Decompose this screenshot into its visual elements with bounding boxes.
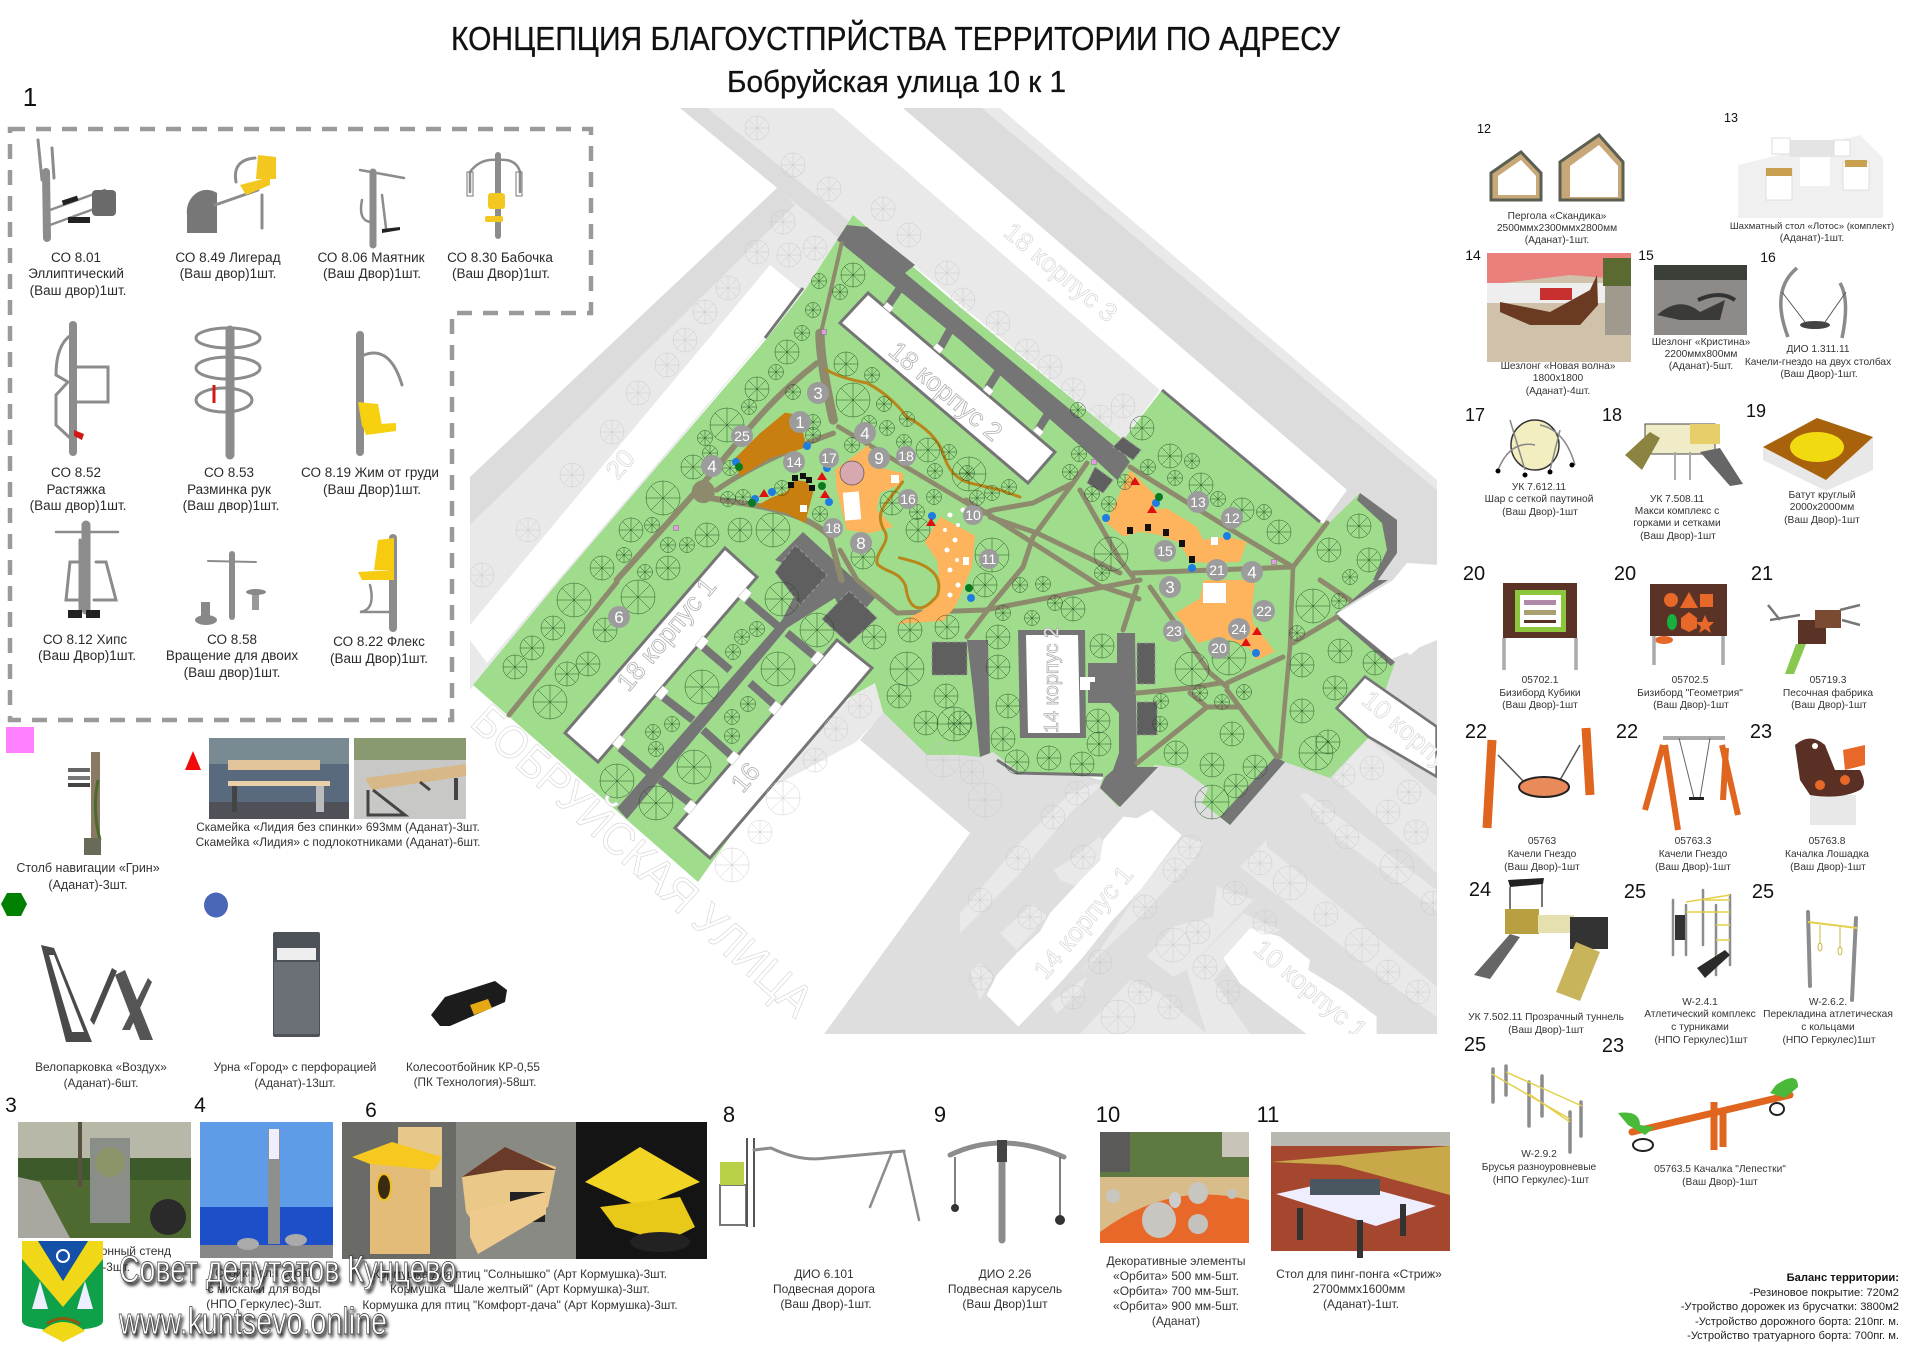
item 11: ping-pong table: (Аданат)-1шт. — [1323, 1297, 1399, 1311]
numbered plan markers: 11 — [982, 551, 996, 567]
item 9: rope carousel: ДИО 2.26 — [979, 1267, 1032, 1281]
item 18: maxi complex: горками и сетками — [1633, 518, 1721, 529]
item 19: trampoline — [1746, 401, 1873, 526]
item 14: lounger photo: (Аданат)-4шт. — [1526, 386, 1590, 397]
item: litter bin: (Аданат)-13шт. — [254, 1076, 336, 1090]
paved footpaths — [509, 243, 1350, 763]
item 20: busy board cubes — [1463, 563, 1581, 711]
rubber surface zones — [733, 413, 813, 523]
numbered plan markers: 9 — [874, 449, 884, 468]
item 15: lounger photo: (Аданат)-5шт. — [1669, 361, 1733, 372]
context labels: 14 корпус 1 — [1027, 860, 1139, 985]
item 23: rocking horse: 23 — [1750, 721, 1772, 743]
item 12: pergola: Пергола «Скандика» — [1508, 211, 1607, 222]
item: bicycle rack — [35, 945, 167, 1090]
item 18: maxi complex — [1602, 405, 1743, 542]
item 23: rocking horse — [1750, 721, 1869, 873]
item: СО 8.22 Флекс: (Ваш Двор)1шт. — [330, 651, 428, 666]
numbered plan markers: 13 — [1190, 494, 1206, 510]
numbered plan markers: 1 — [795, 413, 805, 432]
building: 16: 16 — [724, 756, 766, 798]
item 16: nest swing on two posts: Качели-гнездо на двух столбах — [1745, 356, 1891, 368]
item 13: chess table: (Аданат)-1шт. — [1780, 233, 1844, 244]
watermark: council name: Совет депутатов Кунцево — [119, 1249, 456, 1291]
photo: dog water post: (НПО Геркулес)-3шт. — [206, 1297, 322, 1311]
item: СО 8.12 Хипс — [38, 525, 136, 663]
item 19: trampoline: 19 — [1746, 401, 1766, 421]
item 10: decorative spheres: 10 — [1096, 1102, 1120, 1127]
numbered plan markers: 21 — [1209, 562, 1225, 578]
item: СО 8.30 Бабочка: (Ваш Двор)1шт. — [452, 266, 550, 281]
item 16: nest swing on two posts: (Ваш Двор)-1шт. — [1780, 369, 1858, 380]
number 4: 4 — [194, 1094, 206, 1117]
item 19: trampoline: Батут круглый — [1788, 490, 1856, 501]
item 17: web sphere — [1465, 405, 1593, 518]
item 12: pergola — [1477, 122, 1623, 246]
item 11: ping-pong table: 11 — [1257, 1102, 1279, 1127]
item: СО 8.06 Маятник: (Ваш Двор)1шт. — [323, 266, 421, 281]
photo: bird feeders: Кормушка "Шале желтый" (Арт Кормушка)-3шт. — [390, 1282, 650, 1296]
numbered plan markers: 25 — [734, 428, 750, 444]
numbered plan markers: 20 — [1211, 640, 1227, 656]
item 18: maxi complex: 18 — [1602, 405, 1622, 425]
item 8: zipline: (Ваш Двор)-1шт. — [780, 1297, 872, 1311]
item 13: chess table — [1724, 111, 1894, 244]
photo: bird feeders: Кормушка для птиц "Комфорт-дача" (Арт Кормушка)-3шт. — [362, 1298, 678, 1312]
item 25: athletic complex: (НПО Геркулес)1шт — [1654, 1035, 1748, 1046]
item: СО 8.19 Жим от груди — [301, 335, 439, 497]
item 10: decorative spheres: «Орбита» 500 мм-5шт. — [1113, 1269, 1239, 1283]
building: 14 корпус 2: 14 корпус 2 — [1041, 627, 1063, 733]
number 3: 3 — [5, 1094, 17, 1117]
numbered plan markers: 22 — [1256, 603, 1272, 619]
item 20: busy board cubes: 05702.1 — [1522, 675, 1559, 686]
item 12: pergola: (Аданат)-1шт. — [1525, 235, 1589, 246]
item: СО 8.22 Флекс — [330, 538, 428, 666]
context labels: БОБРУЙСКАЯ УЛИЦА — [462, 694, 824, 1027]
item 13: chess table: 13 — [1724, 111, 1738, 125]
item 20: busy board cubes: 20 — [1463, 563, 1485, 585]
item 10: decorative spheres: «Орбита» 700 мм-5шт. — [1113, 1284, 1239, 1298]
item 14: lounger photo: 14 — [1465, 247, 1481, 263]
watermark: website: www.kuntsevo.online — [118, 1301, 387, 1343]
item: СО 8.58 Вращение для двоих — [166, 554, 298, 680]
item 22: swing: 05763.3 — [1675, 836, 1712, 847]
item 19: trampoline: 2000х2000мм — [1790, 502, 1854, 513]
numbered plan markers: 3 — [1165, 578, 1175, 597]
photo: benches — [196, 738, 480, 849]
item 25: athletic complex: 25 — [1624, 881, 1646, 903]
item 24: tunnel complex: УК 7.502.11 Прозрачный туннель — [1468, 1012, 1624, 1023]
photo: info stand: Информационный стенд — [34, 1244, 171, 1258]
item 25: pull-up bar with rings: 25 — [1752, 881, 1774, 903]
context labels: 10 корпус 1 — [1248, 933, 1373, 1045]
item 23: seesaw: 23 — [1602, 1035, 1624, 1057]
item 22: nest swing — [1465, 721, 1590, 873]
title — [451, 20, 1341, 99]
numbered plan markers: 8 — [856, 534, 866, 553]
photo: bird feeders — [342, 1122, 707, 1312]
item 25: pull-up bar with rings: W-2.6.2. — [1809, 997, 1847, 1008]
parking lots — [775, 437, 1157, 735]
road stubs and thin curbs — [620, 288, 1320, 803]
item: СО 8.53 Разминка рук: СО 8.53 — [204, 465, 254, 480]
lawn — [473, 215, 1397, 882]
item 18: maxi complex: Макси комплекс с — [1635, 506, 1719, 517]
item: СО 8.52 Растяжка — [30, 325, 126, 513]
legend: green hexagon — [1, 893, 27, 916]
item: wheel stop — [406, 981, 540, 1089]
item 14: lounger photo: 1800х1800 — [1533, 373, 1584, 384]
item 15: lounger photo: 15 — [1638, 247, 1654, 263]
item 22: swing: Качели Гнездо — [1659, 849, 1728, 860]
item: СО 8.52 Растяжка: (Ваш двор)1шт. — [30, 498, 126, 513]
item 18: maxi complex: (Ваш Двор)-1шт — [1640, 531, 1716, 542]
logo: Kuntsevo coat of arms — [22, 1241, 103, 1342]
site plan map — [462, 108, 1481, 1045]
item 9: rope carousel: (Ваш Двор)1шт — [962, 1297, 1048, 1311]
item 23: seesaw: 05763.5 Качалка "Лепестки" — [1654, 1164, 1786, 1175]
item: litter bin — [214, 932, 376, 1090]
site furniture markers — [674, 330, 1276, 657]
item 13: chess table: Шахматный стол «Лотос» (комплект) — [1730, 221, 1894, 232]
item 25: multi-level bars: Брусья разноуровневые — [1482, 1162, 1597, 1173]
item 17: web sphere: 17 — [1465, 405, 1485, 425]
item: bicycle rack: Велопарковка «Воздух» — [35, 1060, 167, 1074]
item: СО 8.19 Жим от груди: (Ваш Двор)1шт. — [323, 482, 421, 497]
item 11: ping-pong table: 2700ммх1600мм — [1313, 1282, 1405, 1296]
item 20: busy board geometry — [1614, 563, 1743, 711]
item 19: trampoline: (Ваш Двор)-1шт — [1784, 515, 1860, 526]
item 23: rocking horse: Качалка Лошадка — [1785, 849, 1869, 860]
item 14: lounger photo: Шезлонг «Новая волна» — [1501, 361, 1616, 372]
item 25: multi-level bars: 25 — [1464, 1034, 1486, 1056]
context blocks and buildings at lower right — [960, 738, 1437, 1034]
item: СО 8.06 Маятник: СО 8.06 Маятник — [317, 250, 425, 265]
photo: info stand: (Аданат)-3шт. — [54, 1260, 130, 1274]
legend: pink square — [6, 727, 34, 753]
item 24: tunnel complex — [1468, 878, 1624, 1036]
item 22: nest swing: (Ваш Двор)-1шт — [1504, 862, 1580, 873]
number 6: 6 — [365, 1099, 377, 1122]
item: СО 8.01 — [28, 140, 126, 298]
item: СО 8.58 Вращение для двоих: Вращение для двоих — [166, 648, 298, 663]
item: navigation post — [16, 752, 160, 892]
building: 18 корпус 1: 18 корпус 1 — [610, 572, 722, 697]
trees in context — [470, 116, 1445, 1034]
numbered plan markers: 16 — [900, 491, 916, 507]
item: СО 8.12 Хипс: СО 8.12 Хипс — [43, 632, 127, 647]
numbered plan markers: 15 — [1157, 543, 1173, 559]
numbered plan markers: 14 — [786, 454, 802, 470]
territory balance text — [1681, 1272, 1899, 1342]
item 21: sand factory: (Ваш Двор)-1шт — [1791, 700, 1867, 711]
item 9: rope carousel — [934, 1102, 1065, 1311]
item 25: multi-level bars: (НПО Геркулес)-1шт — [1493, 1175, 1590, 1186]
item 15: lounger photo: 2200ммх800мм — [1665, 349, 1737, 360]
territory balance text: -Резиновое покрытие: 720м2 — [1749, 1287, 1899, 1299]
building: 18 корпус 2: 18 корпус 2 — [883, 335, 1008, 447]
numbered plan markers: 18 — [825, 520, 841, 536]
item 11: ping-pong table: Стол для пинг-понга «Стриж» — [1276, 1267, 1442, 1281]
numbered plan markers: 3 — [813, 384, 823, 403]
item 8: zipline: 8 — [723, 1102, 735, 1127]
title: КОНЦЕПЦИЯ БЛАГОУСТПРЙСТВА ТЕРРИТОРИИ ПО АДРЕСУ — [451, 20, 1341, 57]
item: СО 8.52 Растяжка: Растяжка — [46, 482, 106, 497]
building: 16 — [675, 640, 872, 858]
item 8: zipline: Подвесная дорога — [773, 1282, 875, 1296]
item 10: decorative spheres — [1096, 1102, 1249, 1328]
access roads — [617, 225, 1397, 825]
item 24: tunnel complex: 24 — [1469, 879, 1491, 901]
building: 18 корпус 1 — [565, 548, 757, 762]
item 18: maxi complex: УК 7.508.11 — [1650, 494, 1704, 505]
title: Бобруйская улица 10 к 1 — [727, 64, 1066, 99]
item: СО 8.52 Растяжка: СО 8.52 — [51, 465, 101, 480]
numbered plan markers: 23 — [1166, 623, 1182, 639]
item 21: sand factory: Песочная фабрика — [1783, 687, 1873, 699]
item 15: lounger photo: Шезлонг «Кристина» — [1652, 337, 1751, 348]
item: litter bin: Урна «Город» с перфорацией — [214, 1060, 376, 1074]
item 20: busy board geometry: Бизиборд "Геометрия" — [1637, 687, 1743, 699]
building at right: 10 корпус — [1334, 675, 1437, 778]
item 12: pergola: 12 — [1477, 122, 1491, 136]
item 22: swing: 22 — [1616, 721, 1638, 743]
item 9: rope carousel: 9 — [934, 1102, 946, 1127]
item 17: web sphere: УК 7.612.11 — [1512, 482, 1566, 493]
item: navigation post: (Аданат)-3шт. — [48, 878, 128, 892]
territory balance text: -Устройство дорожного борта: 210пг. м. — [1695, 1316, 1899, 1328]
item 25: athletic complex: с турниками — [1671, 1022, 1729, 1033]
item 20: busy board geometry: (Ваш Двор)-1шт — [1653, 700, 1729, 711]
item 20: busy board cubes: (Ваш Двор)-1шт — [1502, 700, 1578, 711]
context labels: 20 — [599, 443, 641, 485]
item 22: nest swing: 22 — [1465, 721, 1487, 743]
item: СО 8.30 Бабочка — [447, 155, 553, 281]
surrounding context: gray blocks — [470, 108, 1437, 1034]
numbered plan markers: 18 — [898, 448, 914, 464]
numbered plan markers: 6 — [614, 608, 624, 627]
item: wheel stop: (ПК Технология)-58шт. — [414, 1075, 536, 1089]
item 16: nest swing on two posts: 16 — [1760, 249, 1776, 265]
play surface zones — [835, 445, 1275, 660]
territory balance text: Баланс территории: — [1787, 1272, 1899, 1284]
territory balance text: -Утройство дорожек из брусчатки: 3800м2 — [1681, 1301, 1899, 1313]
numbered plan markers: 17 — [821, 450, 837, 466]
context labels — [462, 216, 1373, 1045]
legend: blue circle — [204, 892, 228, 918]
item 15: lounger photo — [1638, 247, 1751, 372]
item 23: rocking horse: (Ваш Двор)-1шт — [1790, 862, 1866, 873]
item: СО 8.49 Лигерад — [175, 155, 281, 281]
item 25: athletic complex — [1624, 881, 1756, 1046]
item 20: busy board geometry: 20 — [1614, 563, 1636, 585]
item 24: tunnel complex: (Ваш Двор)-1шт — [1508, 1025, 1584, 1036]
item 25: athletic complex: W-2.4.1 — [1682, 997, 1718, 1008]
item 25: pull-up bar with rings: Перекладина атлетическая — [1763, 1009, 1893, 1020]
wooden trails — [827, 370, 1020, 608]
photo: benches: Скамейка «Лидия без спинки» 693мм (Аданат)-3шт. — [196, 820, 480, 834]
item: СО 8.12 Хипс: (Ваш Двор)1шт. — [38, 648, 136, 663]
white entrances — [612, 302, 1044, 814]
item 23: seesaw — [1602, 1035, 1798, 1188]
photo: benches: Скамейка «Лидия» с подлокотниками (Аданат)-6шт. — [196, 835, 480, 849]
numbered plan markers: 4 — [1247, 563, 1257, 582]
item: navigation post: Столб навигации «Грин» — [16, 861, 160, 875]
item 16: nest swing on two posts — [1745, 249, 1891, 380]
item 14: lounger photo — [1465, 247, 1631, 397]
numbered plan markers: 24 — [1231, 621, 1247, 637]
item 25: multi-level bars — [1464, 1034, 1597, 1186]
item 23: rocking horse: 05763.8 — [1809, 836, 1846, 847]
item: wheel stop: Колесоотбойник КР-0,55 — [406, 1060, 540, 1074]
item 25: pull-up bar with rings: (НПО Геркулес)1шт — [1782, 1035, 1876, 1046]
item: СО 8.01: СО 8.01 — [51, 250, 101, 265]
item 21: sand factory: 21 — [1751, 563, 1773, 585]
photo: dog water post — [200, 1122, 333, 1311]
photo: bird feeders: Кормушка для птиц "Солнышко" (Арт Кормушка)-3шт. — [373, 1267, 667, 1281]
territory balance text: -Устройство тратуарного борта: 700пг. м. — [1687, 1330, 1899, 1342]
item 8: zipline: ДИО 6.101 — [794, 1267, 854, 1281]
numbered plan markers — [608, 382, 1275, 659]
item 17: web sphere: (Ваш Двор)-1шт — [1502, 507, 1578, 518]
item 25: pull-up bar with rings — [1752, 881, 1893, 1046]
item 12: pergola: 2500ммх2300ммх2800мм — [1497, 223, 1617, 234]
item 25: pull-up bar with rings: с кольцами — [1801, 1022, 1855, 1033]
photo: info stand — [18, 1122, 191, 1274]
item 22: nest swing: Качели Гнездо — [1508, 849, 1577, 860]
numbered plan markers: 10 — [965, 507, 981, 523]
item: СО 8.01: Эллиптический — [28, 266, 124, 281]
item 9: rope carousel: Подвесная карусель — [948, 1282, 1062, 1296]
item 10: decorative spheres: Декоративные элементы — [1107, 1254, 1245, 1268]
item: СО 8.53 Разминка рук: (Ваш двор)1шт. — [183, 498, 279, 513]
trees on site — [503, 263, 1387, 820]
item: СО 8.30 Бабочка: СО 8.30 Бабочка — [447, 250, 553, 265]
item 16: nest swing on two posts: ДИО 1.311.11 — [1786, 344, 1850, 355]
numbered plan markers: 4 — [860, 424, 870, 443]
item 11: ping-pong table — [1257, 1102, 1450, 1311]
item: СО 8.58 Вращение для двоих: (Ваш двор)1шт. — [184, 665, 280, 680]
item: СО 8.53 Разминка рук: Разминка рук — [187, 482, 271, 497]
item: СО 8.01: (Ваш двор)1шт. — [30, 283, 126, 298]
item 21: sand factory: 05719.3 — [1810, 675, 1847, 686]
building: 18 корпус 2 — [840, 293, 1055, 483]
item 8: zipline — [720, 1102, 919, 1311]
item: bicycle rack: (Аданат)-6шт. — [64, 1076, 138, 1090]
item: СО 8.53 Разминка рук — [183, 328, 279, 513]
panel: dashed outdoor gym frame — [10, 129, 591, 720]
numbered plan markers: 12 — [1224, 510, 1240, 526]
photo: dog water post: Стойка для собак — [215, 1266, 314, 1280]
panel: section 1 number: 1 — [23, 82, 37, 112]
item 22: swing: (Ваш Двор)-1шт — [1655, 862, 1731, 873]
item 20: busy board geometry: 05702.5 — [1672, 675, 1709, 686]
item 10: decorative spheres: (Аданат) — [1152, 1314, 1200, 1328]
item 21: sand factory — [1751, 563, 1873, 711]
item: СО 8.58 Вращение для двоих: СО 8.58 — [207, 632, 257, 647]
item: СО 8.49 Лигерад: СО 8.49 Лигерад — [175, 250, 281, 265]
item: СО 8.22 Флекс: СО 8.22 Флекс — [333, 634, 425, 649]
item 25: athletic complex: Атлетический комплекс — [1644, 1009, 1756, 1020]
building at right: 10 корпус: 10 корпус 1 — [1356, 684, 1481, 796]
numbered plan markers: 4 — [707, 457, 717, 476]
item 20: busy board cubes: Бизиборд Кубики — [1499, 687, 1581, 699]
item 22: swing — [1616, 721, 1738, 873]
context labels: 18 корпус 3 — [998, 216, 1123, 328]
legend: red triangle — [185, 751, 201, 770]
item: СО 8.06 Маятник — [317, 170, 425, 281]
item: СО 8.49 Лигерад: (Ваш двор)1шт. — [180, 266, 276, 281]
photo: dog water post: с мисками для воды — [208, 1282, 320, 1296]
item 17: web sphere: Шар с сеткой паутиной — [1485, 494, 1593, 505]
item: СО 8.19 Жим от груди: СО 8.19 Жим от груди — [301, 465, 439, 480]
item 23: seesaw: (Ваш Двор)-1шт — [1682, 1177, 1758, 1188]
building: 14 корпус 2 — [1026, 627, 1095, 733]
item 10: decorative spheres: «Орбита» 900 мм-5шт. — [1113, 1299, 1239, 1313]
item 22: nest swing: 05763 — [1528, 836, 1556, 847]
item 25: multi-level bars: W-2.9.2 — [1521, 1149, 1557, 1160]
